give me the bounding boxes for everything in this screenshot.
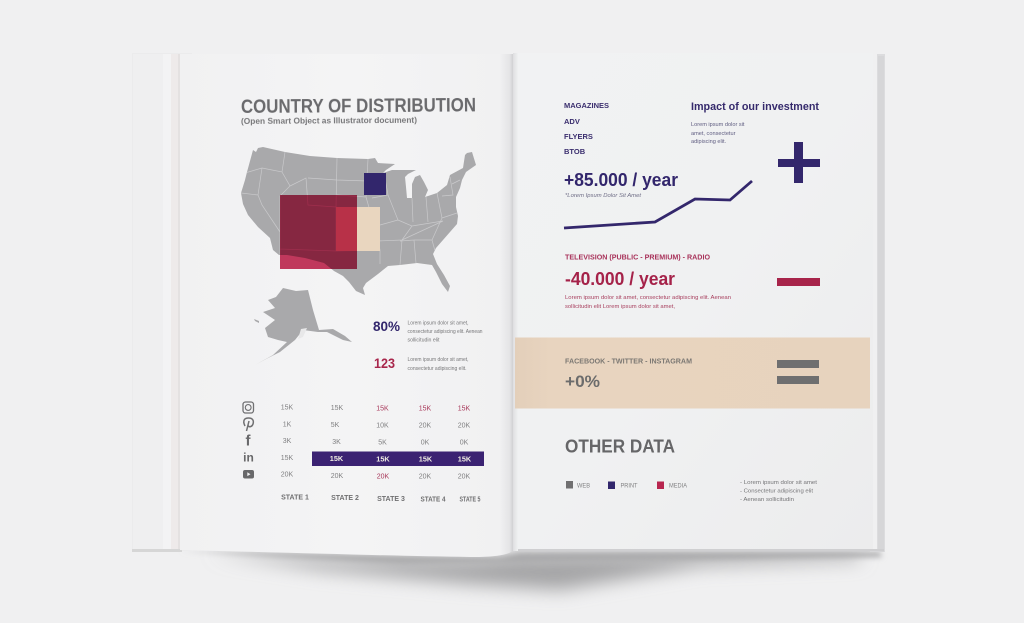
book cover and spine, left bbox=[132, 53, 192, 552]
column headers: STATE 5 bbox=[460, 496, 481, 504]
stat: 123 bbox=[374, 355, 469, 372]
row: pinterest bbox=[283, 422, 471, 430]
row: facebook: 3K bbox=[283, 438, 292, 445]
footnote: *Lorem Ipsum Dolor Sit Amet bbox=[565, 193, 642, 199]
stat: 80%: sollicitudin elit bbox=[408, 338, 440, 344]
heading: impact of our investment: Impact of our investment bbox=[691, 101, 819, 113]
row: linkedin with highlighted bar: 15K bbox=[419, 454, 433, 464]
channel list: BTOB bbox=[564, 147, 586, 156]
map: Alaska bbox=[254, 288, 352, 365]
bullet list: - Consectetur adipiscing elit bbox=[740, 488, 813, 494]
row: youtube bbox=[281, 472, 471, 480]
row: youtube: 20K bbox=[458, 474, 471, 480]
row: youtube: 20K bbox=[419, 474, 432, 480]
row: linkedin with highlighted bar bbox=[281, 452, 484, 466]
legend: MEDIA bbox=[669, 484, 687, 490]
figure: -40.000 / year: -40.000 / year bbox=[565, 269, 675, 289]
social data table bbox=[243, 402, 484, 504]
row: instagram: 15K bbox=[376, 406, 389, 412]
row: instagram: 15K bbox=[281, 404, 294, 412]
panel: right page bbox=[513, 53, 873, 551]
row: linkedin with highlighted bar: 15K bbox=[376, 454, 390, 464]
row: instagram bbox=[281, 404, 471, 412]
bullet list bbox=[740, 480, 817, 503]
row: pinterest: 10K bbox=[376, 422, 389, 430]
row: linkedin with highlighted bar: 15K bbox=[458, 454, 472, 464]
bullet list: - Aenean sollicitudin bbox=[740, 497, 794, 503]
row: instagram: 15K bbox=[419, 406, 432, 412]
stat: 80%: consectetur adipiscing elit. Aenean bbox=[408, 329, 482, 335]
stat: 80%: Lorem ipsum dolor sit amet, bbox=[408, 320, 469, 326]
row: facebook: 0K bbox=[460, 440, 469, 446]
figure: +0%: +0% bbox=[565, 372, 600, 391]
icon: linkedin: in bbox=[243, 450, 254, 464]
icon: minus bbox=[777, 278, 820, 286]
legend bbox=[566, 481, 687, 490]
row: pinterest: 1K bbox=[283, 422, 292, 428]
icon: pinterest bbox=[244, 418, 253, 431]
row: instagram: 15K bbox=[331, 405, 344, 412]
column headers: STATE 2 bbox=[331, 495, 359, 502]
line chart bbox=[564, 181, 752, 228]
map highlight: peach square bbox=[336, 207, 380, 251]
row: youtube: 20K bbox=[281, 472, 294, 478]
row: facebook: 0K bbox=[421, 440, 430, 446]
row: linkedin with highlighted bar: 15K bbox=[330, 454, 344, 463]
row: facebook bbox=[283, 438, 469, 446]
bullet list: - Lorem ipsum dolor sit amet bbox=[740, 480, 817, 486]
impact body text bbox=[691, 122, 745, 145]
stat: 123: 123 bbox=[374, 355, 395, 371]
book shadow bbox=[180, 551, 882, 590]
column headers bbox=[281, 494, 481, 504]
label: television: TELEVISION (PUBLIC - PREMIUM) - RADIO bbox=[565, 254, 711, 262]
column headers: STATE 1 bbox=[281, 494, 309, 502]
row: facebook: 5K bbox=[378, 440, 387, 446]
title: COUNTRY OF DISTRIBUTION bbox=[241, 94, 476, 118]
channel list: MAGAZINES bbox=[564, 101, 609, 110]
row: facebook: 3K bbox=[332, 439, 341, 446]
legend: WEB bbox=[577, 484, 590, 490]
stat: 123: consectetur adipiscing elit. bbox=[408, 366, 467, 372]
television body text: Lorem ipsum dolor sit amet, consectetur adipiscing elit. Aenean bbox=[565, 295, 731, 301]
figure: +85.000 / year: +85.000 / year bbox=[564, 170, 678, 190]
channel list: ADV bbox=[564, 117, 580, 126]
map highlight: navy square bbox=[364, 173, 386, 195]
row: youtube: 20K bbox=[331, 473, 344, 480]
channel list: FLYERS bbox=[564, 132, 593, 141]
row: pinterest: 20K bbox=[419, 422, 432, 430]
subtitle: (Open Smart Object as Illustrator document) bbox=[241, 115, 417, 126]
television body text bbox=[565, 295, 731, 310]
row: youtube: 20K bbox=[377, 474, 390, 480]
map: contiguous United States bbox=[241, 147, 476, 295]
row: instagram: 15K bbox=[458, 406, 471, 412]
stat: 80% bbox=[373, 318, 482, 344]
television body text: sollicitudin elit Lorem ipsum dolor sit amet, bbox=[565, 304, 675, 310]
impact body text: Lorem ipsum dolor sit bbox=[691, 122, 745, 128]
band: social media bbox=[515, 338, 870, 408]
label: social networks: FACEBOOK - TWITTER - INSTAGRAM bbox=[565, 358, 692, 366]
icon: plus bbox=[778, 142, 820, 183]
heading: other data: OTHER DATA bbox=[565, 436, 675, 456]
column headers: STATE 3 bbox=[377, 496, 405, 503]
icon: instagram bbox=[243, 402, 254, 413]
stat: 123: Lorem ipsum dolor sit amet, bbox=[408, 357, 469, 363]
icon: youtube bbox=[243, 470, 254, 478]
column headers: STATE 4 bbox=[420, 496, 446, 504]
stat: 80%: 80% bbox=[373, 318, 401, 334]
row: linkedin with highlighted bar: 15K bbox=[281, 455, 294, 462]
impact body text: adipiscing elit. bbox=[691, 139, 727, 145]
open book mockup scene bbox=[132, 53, 885, 600]
row: pinterest: 5K bbox=[331, 422, 340, 429]
icon: facebook: f bbox=[246, 432, 252, 450]
book cover and page edges, right bbox=[515, 54, 885, 552]
impact body text: amet, consectetur bbox=[691, 131, 736, 137]
map highlight: crimson square bbox=[280, 195, 357, 269]
channel list bbox=[564, 101, 609, 156]
icon: equals bbox=[777, 360, 819, 384]
row: pinterest: 20K bbox=[458, 422, 471, 430]
legend: PRINT bbox=[620, 484, 638, 490]
panel: left page bbox=[180, 54, 513, 557]
